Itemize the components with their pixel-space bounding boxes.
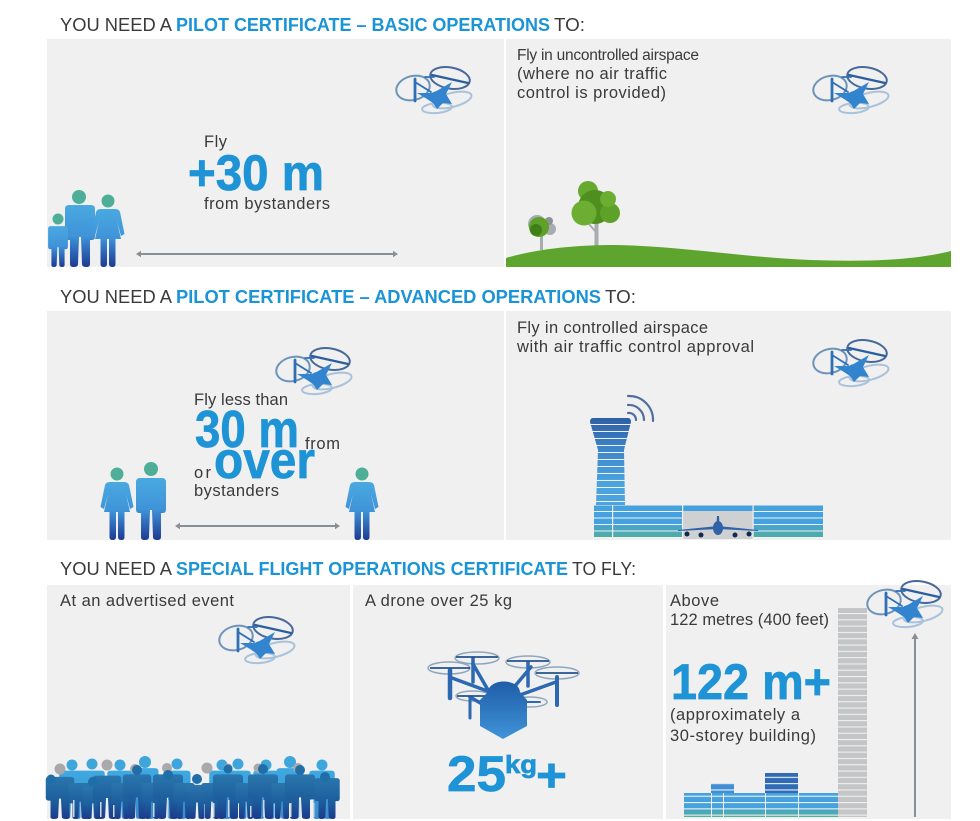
icon: two bystanders <box>100 462 166 540</box>
text: 25 kg plus: + <box>536 749 567 801</box>
text: approximately a 30-storey building: 30-storey building) <box>670 727 816 745</box>
heading: special flight operations: SPECIAL FLIGHT OPERATIONS CERTIFICATE <box>176 559 568 579</box>
text: fly 30 m from bystanders <box>188 133 330 213</box>
arrow: distance between bystanders <box>175 523 340 529</box>
text: fly less than 30 m or over: Fly less than <box>194 391 288 409</box>
icon: drone, panel 3 <box>273 345 353 395</box>
heading: special flight operations: YOU NEED A <box>60 559 172 579</box>
text: controlled airspace <box>516 319 754 356</box>
text: advertised event: At an advertised event <box>60 592 234 610</box>
icon: crowd of people <box>46 756 340 819</box>
text: fly less than 30 m or over: over <box>214 432 315 490</box>
text: controlled airspace: Fly in controlled airspace <box>517 319 708 337</box>
text: approximately a 30-storey building <box>670 706 816 745</box>
icon: drone, panel 4 <box>810 337 890 387</box>
text: controlled airspace: with air traffic control approval <box>516 338 754 356</box>
text: 25 kg plus: kg <box>505 751 537 779</box>
icon: lone bystander <box>346 468 378 540</box>
heading: special flight operations: TO FLY: <box>572 559 636 579</box>
arrow: distance from bystanders <box>136 251 398 257</box>
heading: advanced operations: YOU NEED A <box>60 287 172 307</box>
icon: trees on hill <box>506 181 951 267</box>
text: fly less than 30 m or over: or <box>194 464 212 482</box>
heading: basic operations: TO: <box>554 15 585 35</box>
icon: drone, panel 5 <box>216 614 296 664</box>
icon: drone, panel 2 <box>810 64 890 114</box>
text: approximately a 30-storey building: (approximately a <box>670 706 801 724</box>
text: fly 30 m from bystanders: Fly <box>204 133 228 151</box>
text: fly less than 30 m or over: bystanders <box>194 482 279 500</box>
panel: drone over 25 kg <box>353 585 663 819</box>
icon: low city skyline <box>684 773 838 817</box>
icon: drone, panel 1 <box>393 64 473 114</box>
text: fly less than 30 m or over: from <box>305 435 340 453</box>
text: 122 m plus: 122 m+ <box>671 654 831 710</box>
heading: basic operations: PILOT CERTIFICATE – BASIC OPERATIONS <box>176 15 550 35</box>
heading: advanced operations: PILOT CERTIFICATE – ADVANCED OPERATIONS <box>176 287 601 307</box>
text: 25 kg plus <box>447 746 567 802</box>
panel: above 122 metres <box>666 585 951 819</box>
icon: drone, panel 7 <box>864 578 944 628</box>
panel: advertised event <box>47 585 350 819</box>
text: 25 kg plus: 25 <box>447 746 506 802</box>
icon: tall grey building <box>838 608 867 817</box>
text: fly less than 30 m or over: 30 m <box>195 401 299 459</box>
heading: advanced operations: TO: <box>605 287 636 307</box>
panel: advanced operations, bystanders <box>47 311 504 540</box>
text: fly less than 30 m or over <box>194 391 340 500</box>
icon: control tower and airport <box>590 396 823 539</box>
text: drone over 25 kg: A drone over 25 kg <box>365 592 512 610</box>
text: above 122 metres: Above <box>670 592 719 610</box>
arrow: altitude <box>912 633 918 817</box>
text: above 122 metres: 122 metres (400 feet) <box>670 611 829 629</box>
icon: heavy hexacopter drone <box>428 652 579 739</box>
heading: basic operations: YOU NEED A <box>60 15 172 35</box>
text: uncontrolled airspace <box>517 47 699 102</box>
text: above 122 metres <box>670 592 829 629</box>
panel: basic operations, uncontrolled airspace <box>506 39 951 267</box>
panel: advanced operations, controlled airspace <box>506 311 951 540</box>
text: fly 30 m from bystanders: from bystanders <box>204 195 330 213</box>
icon: family of three <box>48 190 124 267</box>
text: fly 30 m from bystanders: +30 m <box>188 145 324 201</box>
text: uncontrolled airspace: (where no air traffic <box>517 65 667 83</box>
panel: basic operations, bystanders <box>47 39 504 267</box>
text: uncontrolled airspace: Fly in uncontrolled airspace <box>517 47 699 64</box>
heading: special flight operations <box>60 559 636 579</box>
text: uncontrolled airspace: control is provided) <box>517 84 666 102</box>
